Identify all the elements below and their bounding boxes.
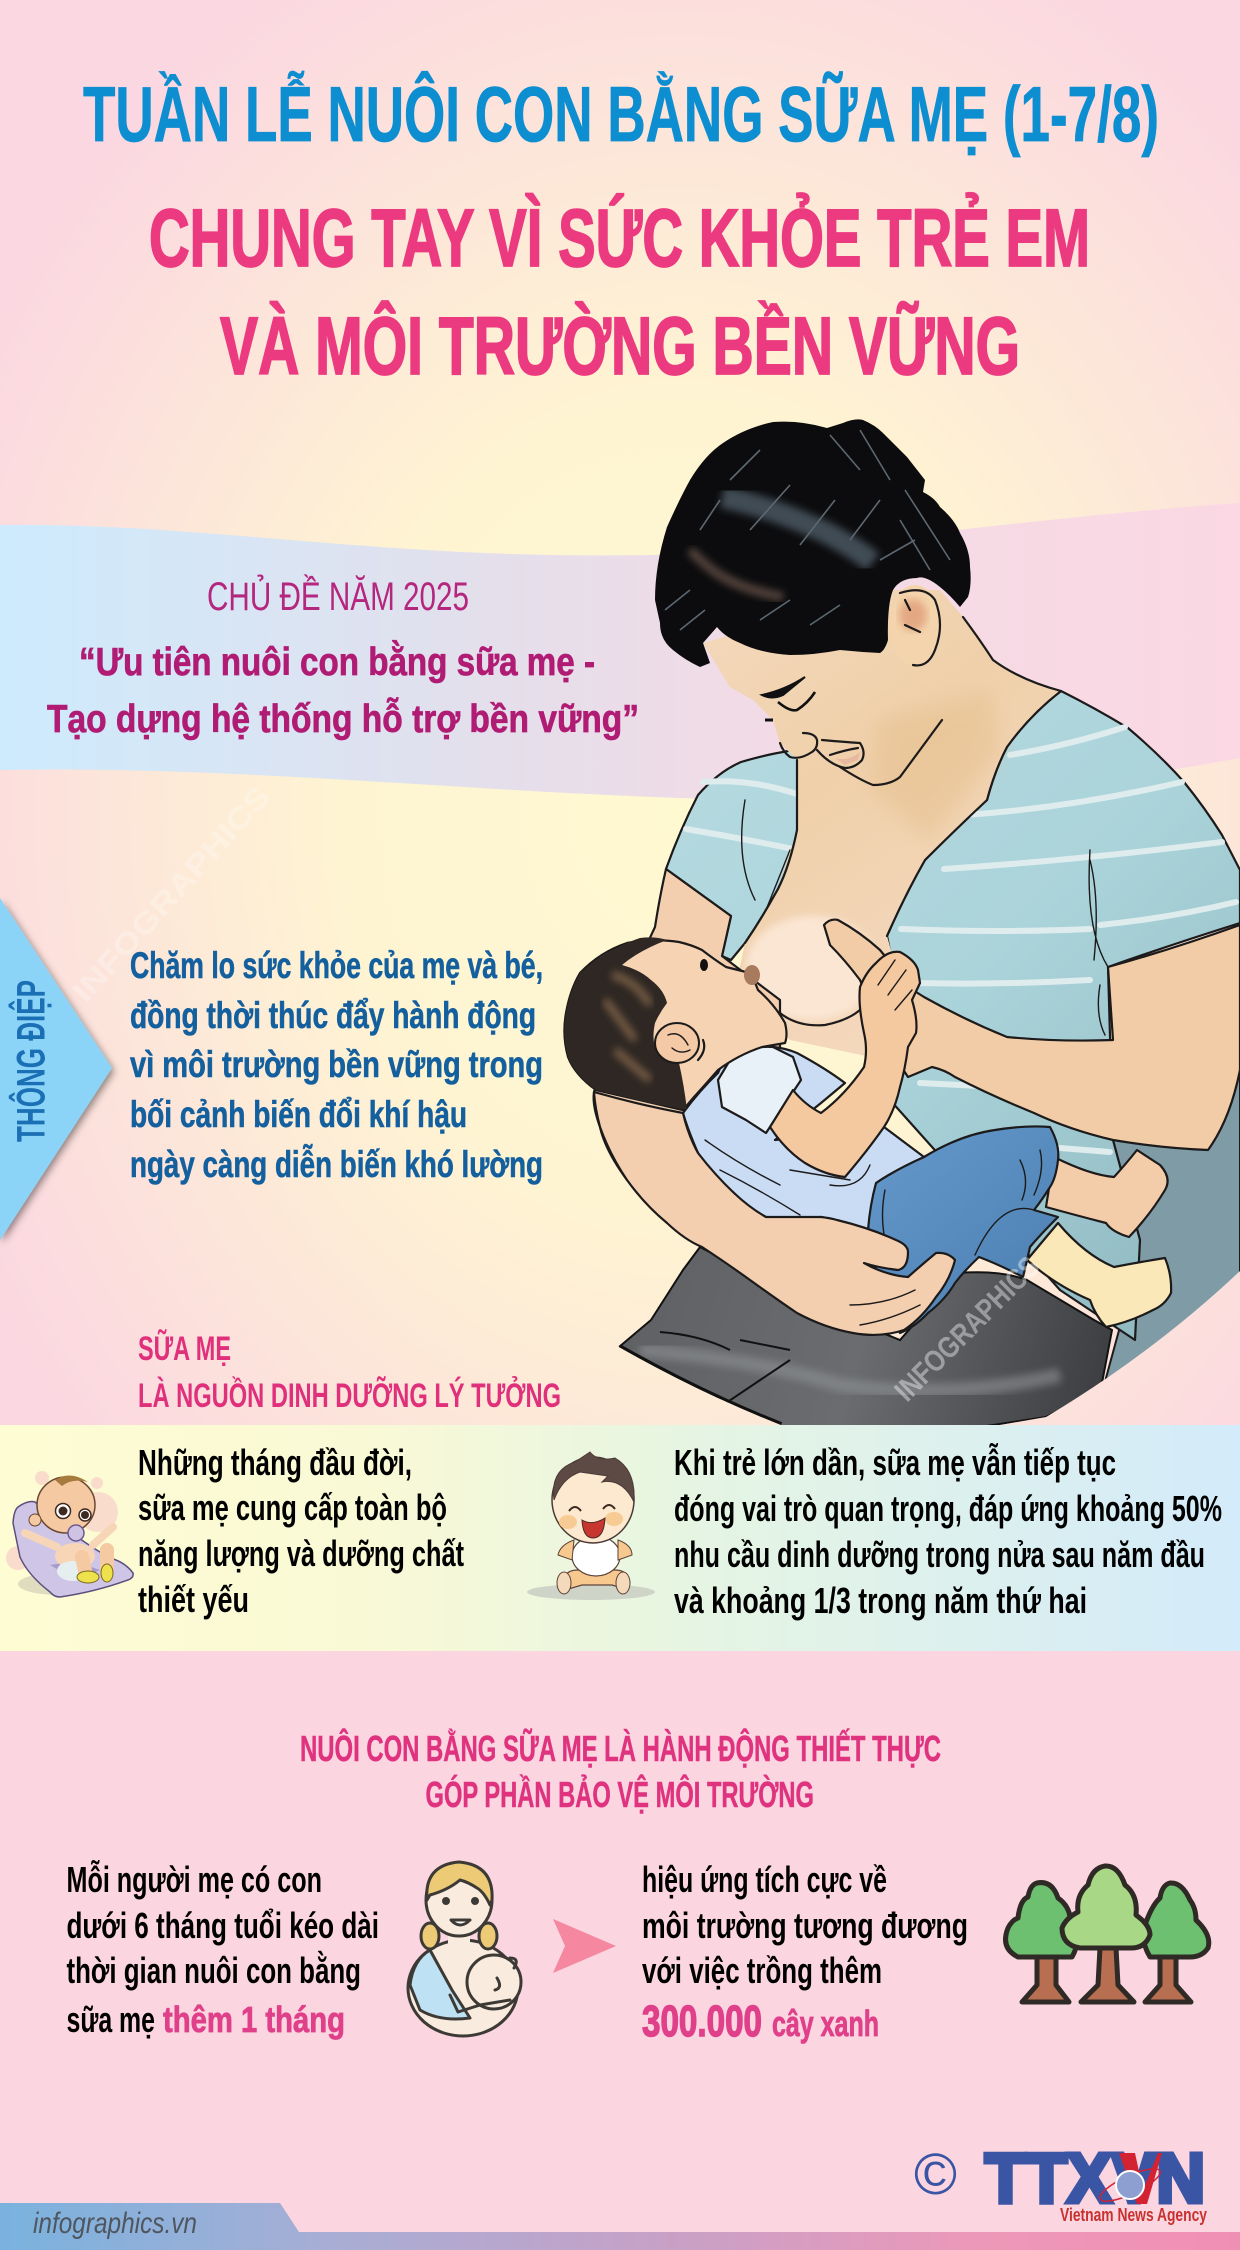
text: positive effect: với việc trồng thêm bbox=[642, 1950, 882, 1991]
text: each mother: Mỗi người mẹ có con bbox=[66, 1859, 322, 1900]
icon: baby on cushion bbox=[6, 1471, 133, 1597]
theme heading: CHỦ ĐỀ NĂM 2025 bbox=[207, 573, 469, 619]
baby legs bbox=[1027, 1150, 1171, 1327]
background wave band bbox=[0, 503, 1240, 801]
text: each mother: thời gian nuôi con bằng bbox=[66, 1949, 361, 1991]
mother face and chest skin bbox=[703, 590, 1061, 1060]
breast highlight bbox=[746, 916, 878, 1020]
icon: three trees bbox=[1006, 1866, 1209, 2002]
message text: ngày càng diễn biến khó lường bbox=[130, 1144, 543, 1185]
baby pants bbox=[867, 1126, 1058, 1333]
mother left arm bbox=[594, 869, 780, 1230]
logo: copyright and TTXVN bbox=[914, 2139, 1207, 2225]
mother hair bbox=[655, 419, 971, 667]
logo: copyright and TTXVN: TTXVN bbox=[985, 2139, 1205, 2217]
neck and chest lines bbox=[745, 617, 1061, 1025]
title: main slogan bbox=[149, 192, 1090, 392]
icon: mother nursing bbox=[408, 1862, 521, 2036]
theme quote bbox=[47, 640, 639, 741]
heading: environmental protection bbox=[300, 1727, 941, 1815]
icon: happy toddler bbox=[527, 1452, 655, 1600]
watermark in background: INFOGRAPHICS bbox=[67, 780, 277, 1009]
mother shirt bbox=[666, 691, 1240, 1340]
theme quote: Tạo dựng hệ thống hỗ trợ bền vững” bbox=[47, 697, 639, 741]
text: first months: năng lượng và dưỡng chất bbox=[138, 1533, 464, 1574]
message text: bối cảnh biến đổi khí hậu bbox=[130, 1094, 467, 1135]
nutrition strip background bbox=[0, 1425, 1240, 1651]
text: first months: Những tháng đầu đời, bbox=[138, 1442, 412, 1483]
heading: environmental protection: GÓP PHẦN BẢO VỆ MÔI TRƯỜNG bbox=[426, 1773, 814, 1815]
chair bbox=[1104, 1076, 1240, 1380]
text: positive effect: 300.000 bbox=[642, 1997, 762, 2046]
mother forearm and hand over baby bbox=[594, 1092, 955, 1335]
heading: breast milk ideal nutrition: LÀ NGUỒN DINH DƯỠNG LÝ TƯỞNG bbox=[138, 1377, 561, 1415]
arrow tag: message: THÔNG ĐIỆP bbox=[8, 980, 54, 1142]
text: first months: thiết yếu bbox=[138, 1579, 249, 1620]
text: positive effect bbox=[642, 1859, 968, 2046]
message text: đồng thời thúc đẩy hành động bbox=[130, 995, 536, 1036]
logo: copyright and TTXVN: © bbox=[914, 2142, 957, 2207]
message text bbox=[130, 945, 543, 1185]
theme block bbox=[47, 573, 639, 741]
arrow tag: message bbox=[0, 898, 112, 1240]
mother right arm and hand bbox=[824, 920, 1240, 1150]
lap bbox=[619, 1247, 1112, 1430]
neck shadow bbox=[870, 690, 1000, 840]
text: positive effect: hiệu ứng tích cực về bbox=[642, 1859, 887, 1900]
baby sleeve bbox=[718, 1047, 801, 1133]
text: each mother: dưới 6 tháng tuổi kéo dài bbox=[66, 1905, 379, 1946]
text: as child grows bbox=[674, 1442, 1222, 1621]
footer bar: infographics.vn bbox=[33, 2207, 197, 2240]
illustration: mother breastfeeding baby bbox=[564, 419, 1240, 1430]
text: first months: sữa mẹ cung cấp toàn bộ bbox=[138, 1487, 447, 1528]
baby head bbox=[564, 937, 786, 1110]
text: each mother bbox=[66, 1859, 379, 2040]
heading: breast milk ideal nutrition bbox=[138, 1330, 561, 1415]
mother ear bbox=[889, 585, 941, 665]
text: as child grows: và khoảng 1/3 trong năm thứ hai bbox=[674, 1580, 1087, 1621]
baby shirt bbox=[683, 1047, 924, 1230]
footer bar bbox=[0, 2203, 1240, 2250]
text: first months bbox=[138, 1442, 464, 1620]
text: each mother: sữa mẹ bbox=[66, 1999, 155, 2040]
heading: environmental protection: NUÔI CON BẰNG SỮA MẸ LÀ HÀNH ĐỘNG THIẾT THỰC bbox=[300, 1727, 941, 1769]
text: positive effect: môi trường tương đương bbox=[642, 1905, 968, 1946]
text: each mother: thêm 1 tháng bbox=[163, 1999, 345, 2040]
mother face features bbox=[762, 677, 864, 768]
arrow: pink bbox=[553, 1919, 616, 1973]
baby arm and hand bbox=[770, 952, 920, 1177]
text: positive effect: cây xanh bbox=[772, 2003, 879, 2044]
watermark on illustration: INFOGRAPHICS bbox=[889, 1250, 1046, 1408]
message text: Chăm lo sức khỏe của mẹ và bé, bbox=[130, 945, 543, 986]
lower pink section background bbox=[0, 1651, 1240, 2250]
message text: vì môi trường bền vững trong bbox=[130, 1044, 543, 1085]
heading: breast milk ideal nutrition: SỮA MẸ bbox=[138, 1330, 231, 1368]
theme quote: “Ưu tiên nuôi con bằng sữa mẹ - bbox=[79, 640, 595, 684]
